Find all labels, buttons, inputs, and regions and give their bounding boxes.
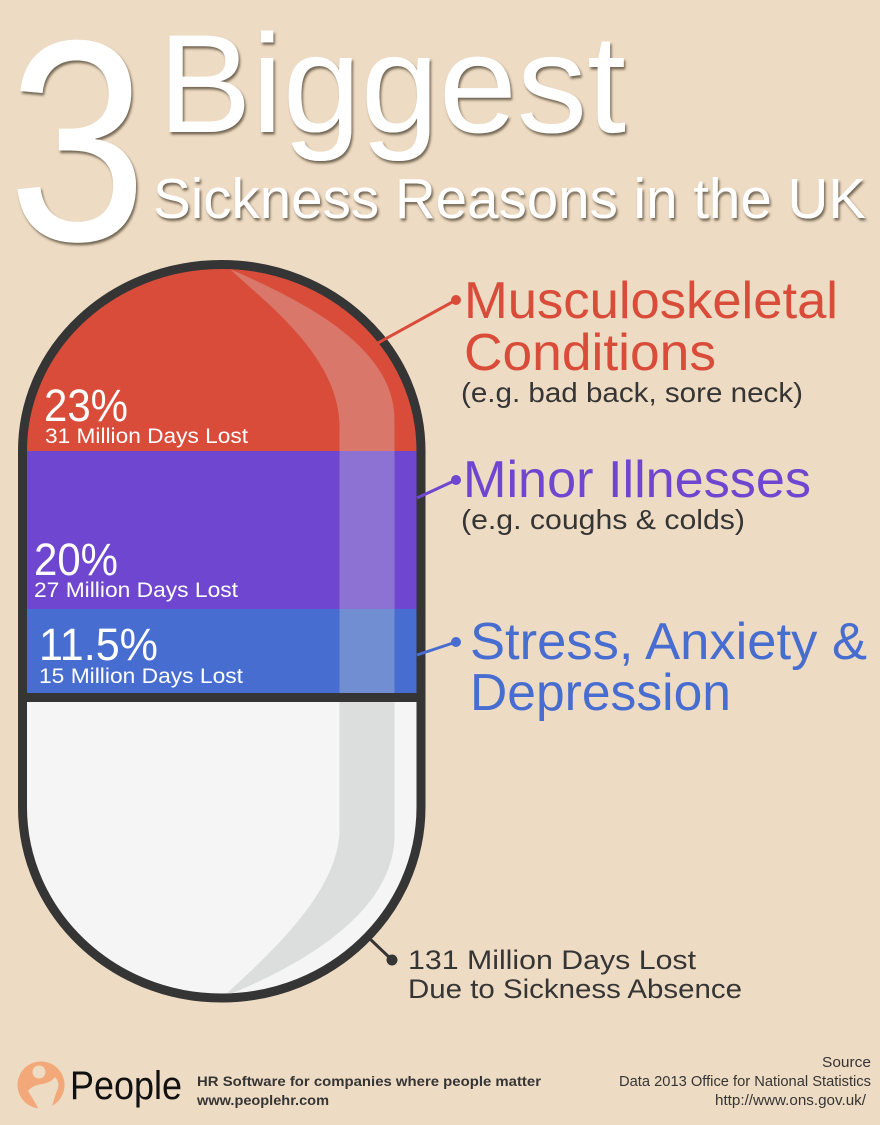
- heading: stress anxiety depression: [470, 613, 867, 722]
- highlight: white area: [227, 702, 394, 993]
- tagline: HR Software for companies where people matter: [197, 1073, 542, 1089]
- tagline: [196, 1073, 542, 1108]
- note: minor illnesses examples: (e.g. coughs & colds): [461, 504, 745, 535]
- source: [619, 1054, 871, 1109]
- label: 20%: 27 Million Days Lost: [34, 579, 238, 602]
- label: 20%: [34, 534, 238, 602]
- connector: total: [369, 938, 398, 966]
- heading: stress anxiety depression: Depression: [470, 664, 731, 722]
- label: 11.5%: [39, 619, 243, 688]
- pill divider: [22, 693, 422, 702]
- icon: people logo: [18, 1062, 64, 1112]
- label: 20%: 20%: [34, 534, 118, 585]
- segment: musculoskeletal: [18, 260, 426, 451]
- label: 23%: 31 Million Days Lost: [45, 425, 248, 448]
- pill chart: [18, 260, 426, 1003]
- title: [8, 0, 866, 301]
- subtitle: Sickness Reasons in the UK: [153, 167, 866, 231]
- label: 23%: [44, 380, 248, 448]
- heading: musculoskeletal conditions: [464, 272, 838, 382]
- source: Source: [822, 1054, 871, 1071]
- pill outline: [22, 264, 421, 998]
- label: 11.5%: 15 Million Days Lost: [39, 665, 243, 688]
- total days lost: Due to Sickness Absence: [408, 974, 742, 1004]
- logo wordmark: People: [70, 1064, 182, 1108]
- tagline: www.peoplehr.com: [196, 1092, 329, 1108]
- total days lost: 131 Million Days Lost: [408, 945, 697, 975]
- pill segments: [18, 260, 426, 1003]
- label: 11.5%: 11.5%: [39, 619, 158, 670]
- segment: remainder: [27, 702, 416, 994]
- segment: minor illnesses: [18, 451, 426, 609]
- segment: stress: [18, 609, 426, 693]
- total days lost: [408, 945, 742, 1004]
- label: 23%: 23%: [44, 380, 128, 431]
- title word: Biggest: Biggest: [158, 5, 626, 162]
- source: Data 2013 Office for National Statistics: [619, 1073, 871, 1090]
- heading: stress anxiety depression: Stress, Anxiety &: [470, 613, 867, 671]
- source: http://www.ons.gov.uk/: [715, 1092, 867, 1109]
- heading: musculoskeletal conditions: Conditions: [464, 324, 716, 382]
- note: musculoskeletal examples: (e.g. bad back, sore neck): [461, 377, 803, 408]
- heading: musculoskeletal conditions: Musculoskeletal: [464, 272, 838, 330]
- highlight: coloured area: [230, 269, 394, 693]
- connector: musculoskeletal: [378, 295, 461, 343]
- connector: minor illnesses: [417, 475, 461, 498]
- connector: stress: [417, 637, 461, 655]
- heading: minor illnesses: Minor Illnesses: [463, 451, 811, 509]
